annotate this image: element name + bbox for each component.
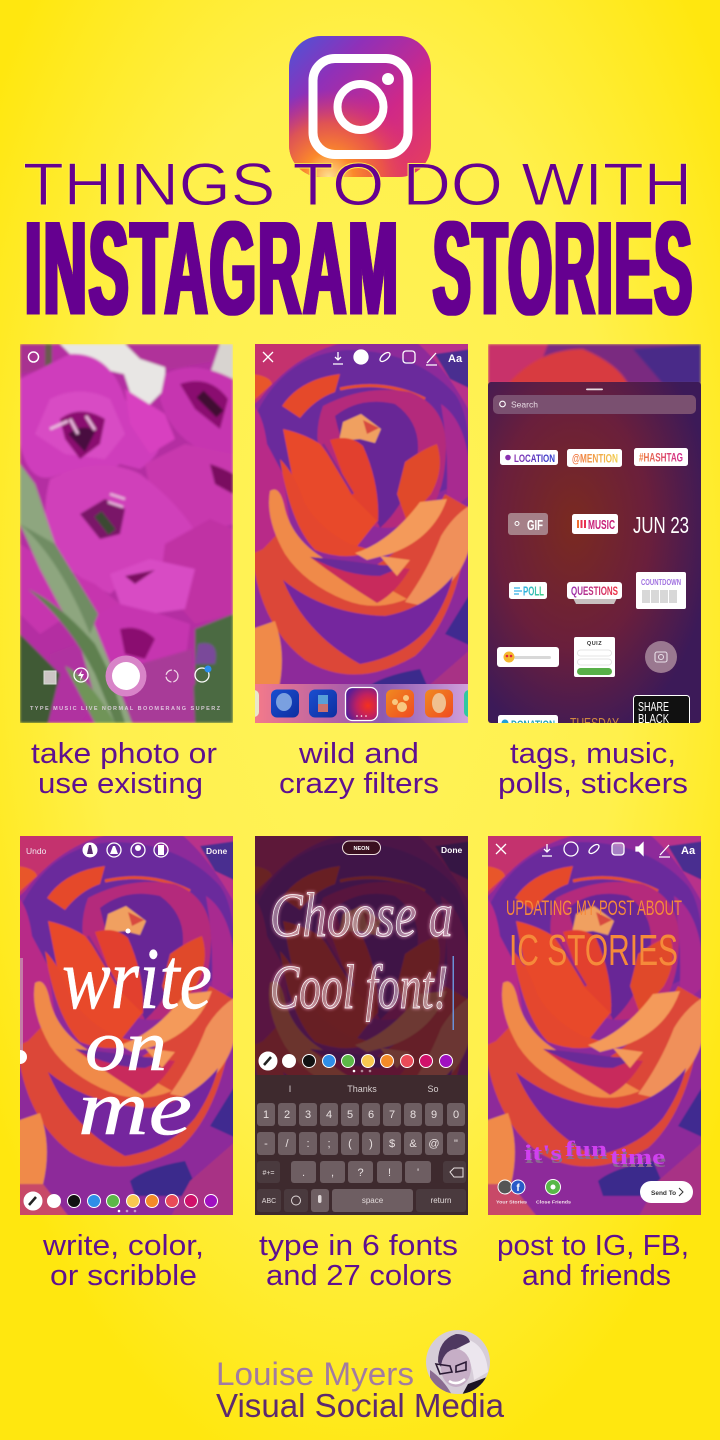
sticker: share black: BLACK: [638, 711, 669, 726]
top toolbar: [496, 842, 696, 857]
keyboard: 4: [326, 1109, 332, 1121]
colour picker: [24, 1192, 218, 1210]
gif sticker: it's fun time: fun: [566, 1139, 608, 1164]
gif sticker: it's fun time: [524, 1136, 666, 1172]
sticker: hashtag: #HASHTAG: [639, 450, 683, 464]
keyboard: 0: [453, 1109, 459, 1121]
pager dots: [118, 1210, 136, 1212]
keyboard: ABC: [262, 1198, 276, 1205]
neon text: [270, 882, 453, 1022]
sticker: poll: [509, 582, 547, 599]
keyboard: &: [409, 1138, 417, 1150]
sticker: share black: SHARE: [638, 699, 669, 714]
sticker: quiz: [574, 637, 615, 677]
keyboard: 3: [305, 1109, 311, 1121]
sticker: music: MUSIC: [588, 517, 615, 532]
handwriting: write on me: write: [62, 931, 212, 1028]
sticker: countdown: [636, 572, 686, 609]
keyboard: (: [348, 1138, 352, 1150]
panel: filters: [247, 341, 476, 726]
caption: stickers: tags, music,: [510, 738, 676, 770]
sticker: questions: [567, 582, 622, 604]
gif sticker: it's fun time: fun: [565, 1136, 607, 1161]
sticker: location: [500, 450, 558, 465]
dark overlay: [255, 836, 468, 1215]
keyboard: return: [431, 1196, 451, 1205]
gif sticker: it's fun time: it's: [525, 1143, 564, 1168]
footer: author portrait: [426, 1330, 490, 1395]
style pill: NEON: [354, 846, 369, 852]
top toolbar: [263, 350, 463, 365]
sticker: share black: [633, 695, 690, 723]
keyboard: Thanks: [347, 1084, 377, 1094]
sticker: emoji slider: [497, 647, 559, 667]
neon text glow: Choose a: [270, 882, 453, 950]
caption: post: and friends: [522, 1260, 671, 1292]
caption: take photo: use existing: [38, 768, 203, 800]
camera modes: TYPE MUSIC LIVE NORMAL BOOMERANG SUPERZ: [30, 706, 221, 712]
footer: brand name: Visual Social Media: [216, 1387, 505, 1424]
sticker: donation: DONATION: [511, 719, 555, 731]
neon text glow: Cool font!: [270, 954, 448, 1022]
share targets: Your Stories: [496, 1200, 527, 1206]
caption: fonts: type in 6 fonts: [259, 1230, 458, 1262]
pager dots: [353, 1070, 371, 1072]
sticker: gif: GIF: [527, 517, 543, 534]
sticker: questions: QUESTIONS: [571, 584, 618, 598]
keyboard: $: [389, 1138, 395, 1150]
keyboard: ?: [357, 1167, 364, 1179]
style pill: [342, 841, 380, 854]
shutter button: [106, 656, 146, 696]
sticker: mention: [567, 449, 622, 467]
rose photo: [255, 344, 468, 684]
keyboard: ": [454, 1138, 458, 1150]
rose backdrop: [488, 344, 701, 384]
share targets: f: [516, 1183, 520, 1194]
rose photo: [485, 833, 704, 1218]
sticker: countdown: COUNTDOWN: [641, 577, 681, 587]
keyboard: ;: [327, 1138, 331, 1150]
top toolbar: Aa: [681, 845, 696, 857]
neon text glow: [270, 882, 453, 1022]
sticker: music: [572, 514, 618, 534]
caption: post: [497, 1230, 689, 1292]
sticker: hashtag: [634, 448, 688, 466]
keyboard: I: [289, 1084, 291, 1094]
keyboard: :: [306, 1138, 310, 1150]
colour picker: [259, 1052, 452, 1070]
keyboard: !: [388, 1167, 391, 1179]
share targets: Close Friends: [536, 1200, 571, 1206]
icon: flash: [74, 668, 88, 682]
send to button: Send To: [651, 1190, 676, 1197]
search bar: [493, 395, 696, 414]
panel: post: [485, 833, 704, 1218]
brush size slider: [13, 928, 130, 1064]
keyboard: 9: [431, 1109, 437, 1121]
panel: stickers: [488, 344, 701, 732]
flower photo: [20, 344, 233, 723]
filter strip: [247, 684, 476, 723]
caption: stickers: polls, stickers: [498, 768, 688, 800]
dimmed rose photo: [252, 833, 471, 1218]
top toolbar: Undo: [26, 846, 47, 856]
caption: write: write, color,: [42, 1230, 204, 1262]
neon text: Cool font!: [270, 954, 448, 1022]
panel: write: [13, 833, 236, 1218]
caption: take photo: take photo or: [31, 738, 217, 770]
keyboard: ,: [331, 1167, 334, 1179]
caption: filters: wild and: [298, 738, 419, 770]
caption: fonts: and 27 colors: [266, 1260, 452, 1292]
keyboard: .: [302, 1167, 305, 1179]
top toolbar: Done: [206, 846, 228, 856]
gif sticker: it's fun time: time: [611, 1147, 666, 1172]
caption: filters: crazy filters: [279, 768, 439, 800]
sticker tray: [488, 382, 701, 723]
neon text: Choose a: [270, 882, 453, 950]
caption: take photo: [31, 738, 217, 800]
handwriting: write on me: me: [78, 1064, 192, 1151]
keyboard: 6: [368, 1109, 374, 1121]
search bar: Search: [511, 400, 538, 410]
sticker: date: JUN 23: [633, 512, 689, 538]
top toolbar: [26, 842, 228, 858]
icon: album: [44, 671, 56, 684]
keyboard: 1: [263, 1109, 269, 1121]
sticker: camera: [645, 641, 677, 673]
keyboard: /: [285, 1138, 289, 1150]
keyboard: [255, 1075, 468, 1215]
sticker: quiz: QUIZ: [587, 641, 602, 647]
keyboard: -: [264, 1138, 268, 1150]
keyboard: 8: [410, 1109, 416, 1121]
sticker: location: LOCATION: [514, 453, 555, 465]
title line 1: THINGS TO DO WITH: [23, 151, 692, 218]
sticker: donation: [498, 715, 558, 723]
keyboard: 7: [389, 1109, 395, 1121]
handwriting: write on me: on: [85, 1006, 167, 1086]
caption: write: or scribble: [50, 1260, 197, 1292]
caption: stickers: [498, 738, 688, 800]
caption: fonts: [259, 1230, 458, 1292]
icon: settings: [28, 352, 38, 362]
keyboard: ): [369, 1138, 373, 1150]
icon: face effects: [195, 666, 212, 682]
gif sticker: it's fun time: time: [610, 1144, 665, 1169]
caption: post: post to IG, FB,: [497, 1230, 689, 1262]
gif sticker: it's fun time: it's: [524, 1140, 563, 1165]
caption: write: [42, 1230, 204, 1292]
top toolbar: Aa: [448, 353, 463, 365]
keyboard: @: [428, 1138, 440, 1150]
sticker: tuesday: TUESDAY: [570, 715, 619, 732]
tray handle: [586, 388, 603, 390]
keyboard: #+=: [262, 1170, 275, 1177]
keyboard: So: [427, 1084, 439, 1094]
icon: Instagram logo: [289, 36, 431, 177]
keyboard: ': [417, 1167, 419, 1179]
handwriting: write on me: [64, 949, 211, 1136]
panel: take photo: [20, 344, 233, 723]
rose photo: [17, 833, 236, 1218]
sticker: poll: POLL: [523, 584, 544, 598]
icon: flip camera: [166, 670, 178, 682]
keyboard: 2: [284, 1109, 290, 1121]
footer: author name: Louise Myers: [216, 1356, 414, 1392]
share targets: [496, 1180, 571, 1206]
sticker: mention: @MENTION: [572, 452, 618, 466]
send to button: [640, 1181, 693, 1203]
keyboard: space: [362, 1196, 384, 1205]
story text: [506, 897, 682, 975]
text cursor: [452, 956, 454, 1030]
panel: fonts: [252, 833, 471, 1218]
keyboard: 5: [347, 1109, 353, 1121]
sticker: gif: [508, 513, 548, 535]
done button: Done: [441, 845, 463, 855]
caption: filters: [279, 738, 439, 800]
